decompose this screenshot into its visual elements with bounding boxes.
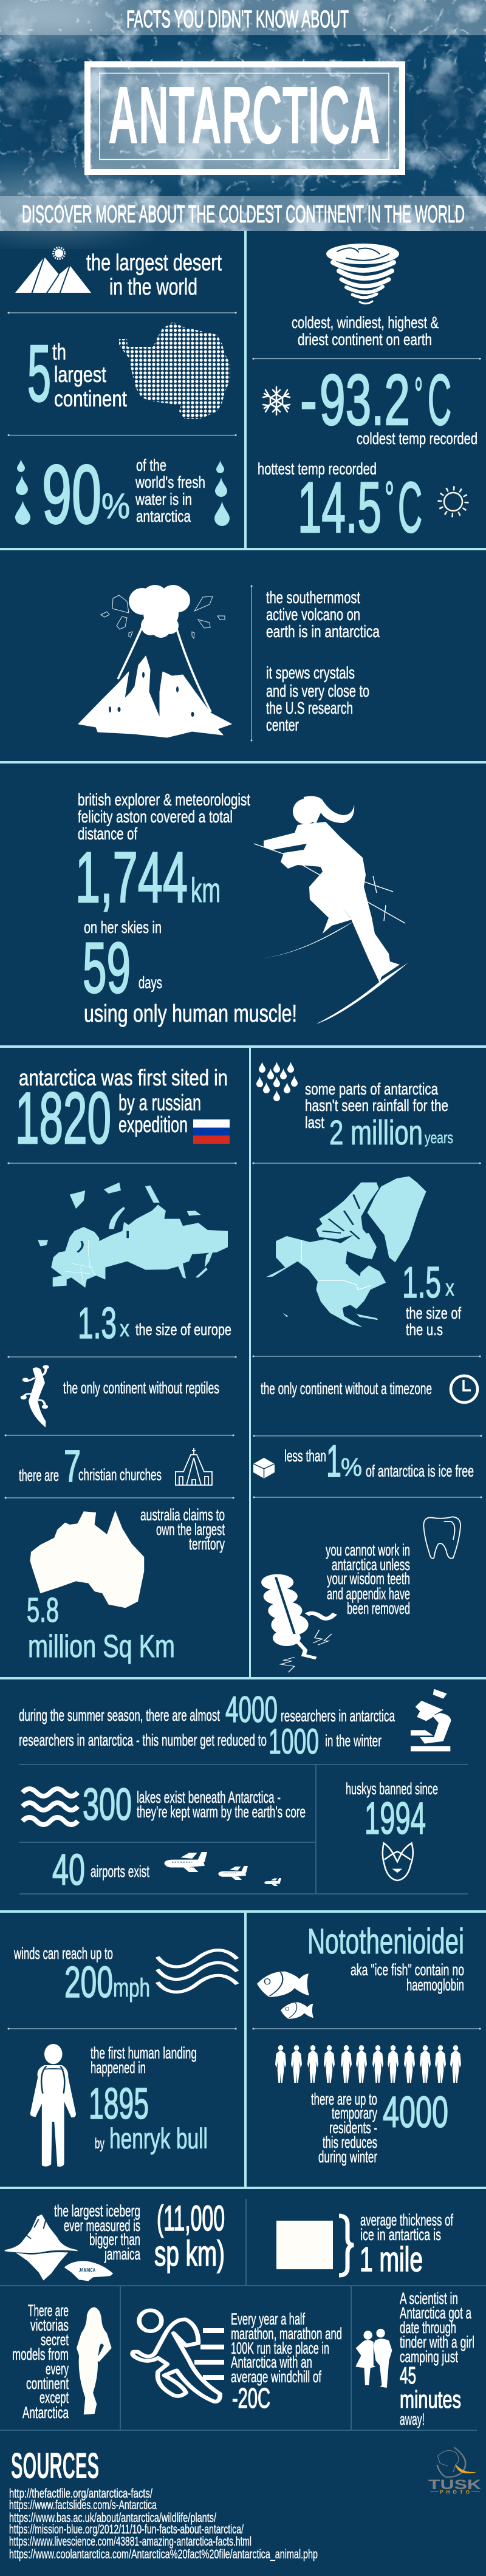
text: of the world's fresh water: antarctica <box>136 507 191 525</box>
stat: 11,000 sq km: (11,000 <box>157 2199 225 2238</box>
text: average thickness <box>360 2211 453 2244</box>
text: australia claims <box>140 1506 225 1553</box>
map: australia <box>30 1511 144 1608</box>
text: no reptiles: the only continent without reptiles <box>63 1379 219 1397</box>
text: wisdom teeth and appendix: your wisdom teeth <box>327 1570 410 1588</box>
stat: 5th: 5 <box>27 329 51 418</box>
icon: runner <box>132 2311 224 2402</box>
text: spews crystals: it spews crystals <box>266 663 355 682</box>
icon: husky head <box>383 1843 413 1881</box>
text: australia claims: own the largest <box>156 1520 225 1539</box>
text: marathon: Every year a half <box>231 2310 305 2328</box>
text: southernmost volcano: active volcano on <box>266 605 360 624</box>
stat: 45 minutes <box>400 2363 461 2413</box>
icon: person with backpack <box>30 2044 76 2167</box>
text: felicity aston intro: british explorer & meteorologist <box>78 790 250 809</box>
panel: notothenioidei fish <box>257 1922 464 2019</box>
panel: winds <box>13 1944 237 2007</box>
panel: volcano <box>78 585 380 737</box>
text: first landing: the first human landing <box>91 2044 197 2062</box>
text: temporary residents <box>311 2090 377 2166</box>
panel: no rainfall <box>256 1062 453 1152</box>
panel: coldest windiest <box>292 244 439 349</box>
panel: ice free <box>253 1436 474 1486</box>
panel: coldest temperature: C <box>428 360 451 440</box>
icon: brace <box>339 2216 354 2275</box>
stat: -93.2°C: 93.2 <box>320 360 410 440</box>
icon: erupting volcano <box>78 585 231 737</box>
stat: 90%: % <box>101 487 130 526</box>
text: source links: https://www.bas.ac.uk/about/antarctica/wildlife/plants/ <box>9 2511 216 2525</box>
text: felicity aston intro: distance of <box>78 824 137 843</box>
text: scientist date <box>400 2289 474 2366</box>
text: temporary residents: during winter <box>318 2148 377 2166</box>
stat: 14.5°C: 14.5 <box>298 468 382 548</box>
text: lakes exist: lakes exist beneath Antarctica - <box>137 1788 281 1806</box>
icon: tornado <box>326 244 399 304</box>
stat: 1.5x: x <box>445 1276 454 1301</box>
icon: woman silhouette <box>77 2307 112 2414</box>
text: southernmost volcano: earth is in antarctica <box>266 622 380 641</box>
text: by henryk bull: by <box>95 2136 104 2152</box>
text: models: every <box>46 2360 69 2378</box>
text: australia claims: territory <box>189 1535 225 1553</box>
panel: first sited 1820 <box>15 1065 230 1159</box>
icon: church <box>176 1448 212 1485</box>
icon: rain drops <box>256 1062 298 1101</box>
text: marathon: 100K run take place in <box>231 2339 329 2357</box>
stat: 300: 300 <box>83 1779 132 1830</box>
text: coldest windiest: coldest, windiest, highest & <box>292 313 439 332</box>
stat: 11,000 sq km: sp km) <box>154 2234 225 2274</box>
text: the size of the us: the size of <box>406 1304 461 1322</box>
panel: ice thickness <box>276 2211 453 2279</box>
text: models: There are <box>28 2301 69 2320</box>
text: by a russian expedition: by a russian <box>118 1090 201 1115</box>
stat: 5.8 million sq km: million Sq Km <box>28 1629 175 1664</box>
stat: 4000 residents: 4000 <box>383 2088 448 2137</box>
stat: 59 days: 59 <box>83 928 131 1008</box>
stat: 1.3x: 1.3 <box>78 1299 117 1348</box>
stat: 1820: 1820 <box>15 1078 111 1159</box>
text: winds can reach: winds can reach up to <box>13 1944 113 1963</box>
stat: 200mph: 200 <box>64 1958 113 2007</box>
text: marathon: marathon, marathon and <box>231 2325 342 2343</box>
icon: waves <box>22 1789 78 1825</box>
panel: 1.5x size of the us <box>266 1177 461 1339</box>
text: by henryk bull: henryk bull <box>109 2122 208 2154</box>
text: largest iceberg: ever measured is <box>64 2216 140 2235</box>
text: spews crystals: and is very close to <box>266 682 369 700</box>
map: russia and europe <box>38 1183 228 1288</box>
stat: 1,744 km: 1,744 <box>75 838 188 918</box>
text: th largest continent <box>52 340 128 411</box>
icon: snowflake <box>263 387 290 415</box>
icon: dotted Antarctica map <box>119 322 230 419</box>
text: southernmost volcano: the southernmost <box>266 588 360 607</box>
panel: no timezone <box>261 1376 477 1402</box>
panel: 300 lakes <box>22 1779 306 1830</box>
panel: australia territory <box>27 1506 225 1664</box>
text: first landing: happened in <box>91 2058 146 2077</box>
stat: 11,000 sq km <box>154 2199 225 2274</box>
stat: 4000 researchers: 4000 <box>225 1689 278 1730</box>
panel: tinder date <box>355 2289 474 2428</box>
text: models <box>12 2301 69 2422</box>
icon: ice cube <box>253 1458 275 1478</box>
icon: ice block <box>276 2221 333 2269</box>
icon: planes <box>164 1852 281 1886</box>
text: there are: there are <box>19 1466 59 1484</box>
icon: couple <box>355 2329 392 2388</box>
icon: gecko <box>21 1365 49 1427</box>
panel: wisdom teeth and appendix <box>261 1517 460 1672</box>
text: hottest temp recorded: hottest temp recorded <box>258 460 377 478</box>
text: by a russian expedition <box>118 1090 201 1137</box>
text: source links <box>9 2487 318 2561</box>
stat: 2 million years: years <box>425 1129 453 1147</box>
stat: 1.3x: x <box>120 1316 129 1342</box>
icon: clock <box>451 1376 477 1402</box>
text: rainfall: some parts of antarctica <box>305 1080 439 1098</box>
text: largest iceberg: the largest iceberg <box>54 2202 140 2220</box>
stat: 200mph: mph <box>113 1973 150 2003</box>
text: away: away! <box>400 2410 425 2428</box>
stat: 59 days: days <box>139 973 162 992</box>
text: models: models from <box>12 2345 69 2363</box>
icon: skier silhouette <box>254 796 408 1024</box>
panel: largest iceberg <box>5 2199 225 2281</box>
stat: -93.2°C: ° <box>414 367 423 422</box>
text: christian churches: christian churches <box>78 1466 162 1484</box>
icon: wind curves <box>157 1950 237 1992</box>
text: temporary residents: there are up to <box>311 2090 377 2108</box>
text: of the world's fresh water: water is in <box>135 490 192 508</box>
label: jamaica on map: JAMAICA <box>79 2267 95 2273</box>
icon: row of people <box>275 2045 461 2083</box>
logo: tusk photo <box>428 2447 481 2495</box>
text: largest desert: in the world <box>109 275 197 300</box>
text: first landing <box>91 2044 197 2077</box>
header: ocean foam banner <box>0 0 486 231</box>
icon: iceberg and jamaica <box>5 2215 113 2281</box>
icon: appendix <box>261 1574 335 1672</box>
text: models: except <box>39 2388 69 2407</box>
panel: sources: SOURCES <box>11 2445 99 2486</box>
text: marathon: Antarctica with an <box>231 2353 312 2371</box>
stat: 45 minutes: 45 <box>400 2363 416 2389</box>
panel: temporary residents <box>275 2045 461 2166</box>
text: temporary residents: this reduces <box>323 2133 377 2151</box>
stat: 1994: 1994 <box>364 1793 426 1843</box>
text: ice fish <box>351 1961 464 1994</box>
stat: 1000 researchers: 1000 <box>269 1722 319 1761</box>
panel: 90 percent fresh water <box>15 448 230 541</box>
stat: 1 mile: 1 mile <box>360 2240 423 2279</box>
panel: no reptiles <box>21 1365 219 1427</box>
panel: coldest temperature <box>263 360 477 448</box>
text: coldest windiest <box>292 313 439 349</box>
stat: 5.8 million sq km <box>27 1591 175 1664</box>
icon: mountains and sun <box>15 248 91 294</box>
stat: 40: 40 <box>52 1846 85 1894</box>
text: largest iceberg: jamaica <box>104 2245 141 2263</box>
text: largest desert <box>86 250 222 300</box>
text: temporary residents: temporary <box>332 2104 377 2122</box>
panel: hottest temperature: C <box>398 468 422 548</box>
text: spews crystals: the U.S research <box>266 699 353 717</box>
text: wisdom teeth and appendix: been removed <box>347 1599 410 1618</box>
logo: tusk photo: TUSK <box>428 2477 481 2492</box>
stat: 1,744 km: km <box>191 871 221 910</box>
panel: largest desert <box>15 248 222 300</box>
text: on her skies in: on her skies in <box>84 918 162 937</box>
text: wisdom teeth and appendix: antarctica unless <box>332 1556 410 1574</box>
text: source links: https://www.livescience.com/43881-amazing-antarctica-facts.html <box>9 2535 252 2549</box>
text: marathon <box>231 2310 342 2386</box>
text: wisdom teeth and appendix: you cannot work in <box>326 1541 410 1559</box>
text: rainfall: last <box>305 1113 324 1132</box>
icon: tooth <box>423 1517 460 1559</box>
panel: 5th largest continent <box>27 322 230 419</box>
text: th largest continent: largest <box>54 362 107 387</box>
text: the size of the us <box>406 1304 461 1339</box>
panel: victorias secret models <box>12 2301 112 2422</box>
text: the size of europe: the size of europe <box>135 1320 231 1339</box>
text: source links: https://www.coolantarctica.com/Antarctica%20fact%20file/antarctica_animal.php <box>9 2547 318 2561</box>
text: source links: http://thefactfile.org/antarctica-facts/ <box>9 2487 152 2501</box>
logo: tusk photo: PHOTO <box>440 2489 470 2495</box>
panel: huskies banned <box>346 1780 438 1881</box>
text: of the world's fresh water: of the <box>136 456 166 474</box>
text: average thickness: ice in antartica is <box>360 2226 441 2244</box>
text: th largest continent: th <box>52 340 66 364</box>
text: lakes exist <box>137 1788 306 1821</box>
stat: 90%: 90 <box>42 448 101 541</box>
stat: 1895: 1895 <box>89 2080 149 2128</box>
text: australia claims: australia claims to <box>140 1506 225 1524</box>
panel: researchers <box>19 1689 451 1761</box>
icon: fish <box>257 1972 313 2019</box>
text: airports exist: airports exist <box>91 1862 149 1881</box>
text: spews crystals: center <box>266 716 299 734</box>
text: models: Antarctica <box>22 2403 69 2422</box>
text: rainfall <box>305 1080 448 1132</box>
map: north america <box>266 1177 426 1327</box>
icon: microscope <box>411 1689 451 1751</box>
text: winter reduction: researchers in antarctica - this number get reduced to <box>19 1731 267 1749</box>
text: models: victorias <box>30 2316 69 2334</box>
stat: 14.5°C: ° <box>385 471 394 525</box>
panel: marathon <box>132 2310 342 2414</box>
text: summer researchers: during the summer season, there are almost <box>19 1706 220 1724</box>
panel: 1.3x size of europe <box>38 1183 231 1348</box>
text: wisdom teeth and appendix: and appendix have <box>327 1585 410 1603</box>
icon: russian flag <box>193 1119 230 1144</box>
text: by henryk bull <box>95 2122 208 2154</box>
text: source links: https://www.factslides.com/s-Antarctica <box>9 2498 157 2512</box>
stat: 1% <box>326 1436 362 1486</box>
text: temporary residents: residents - <box>329 2119 377 2137</box>
text: largest iceberg <box>54 2202 141 2263</box>
text: of the world's fresh water: world's fresh <box>135 473 205 491</box>
panel: 40 airports <box>52 1846 281 1894</box>
text: first sited: antarctica was first sited in <box>19 1065 228 1090</box>
panel: sources <box>9 2445 318 2561</box>
stat: 2 million years: 2 million <box>329 1113 423 1152</box>
stat: 45 minutes: minutes <box>400 2386 461 2413</box>
stat: 1%: % <box>341 1453 362 1481</box>
icon: water drops left <box>15 459 30 525</box>
panel: christian churches <box>19 1441 212 1491</box>
text: wisdom teeth and appendix <box>326 1541 410 1618</box>
text: in the winter: in the winter <box>325 1732 382 1750</box>
text: of the world's fresh water <box>135 456 205 525</box>
text: coldest windiest: driest continent on earth <box>298 330 432 349</box>
text: felicity aston intro <box>78 790 250 843</box>
text: spews crystals <box>266 663 369 734</box>
text: felicity aston intro: felicity aston covered a total <box>78 807 233 826</box>
stat: -20C: -20C <box>232 2382 270 2414</box>
panel: first human landing <box>30 2044 208 2167</box>
text: source links: https://mission-blue.org/2012/11/10-fun-facts-about-antarctica/ <box>9 2523 244 2537</box>
text: largest desert: the largest desert <box>86 250 222 276</box>
panel: felicity aston skier <box>75 790 408 1027</box>
text: using only human muscle: using only human muscle! <box>84 1000 297 1027</box>
text: models: secret <box>41 2331 69 2349</box>
text: lakes exist: they're kept warm by the earth's core <box>137 1803 306 1821</box>
text: southernmost volcano <box>266 588 380 641</box>
stat: 5.8 million sq km: 5.8 <box>27 1591 59 1630</box>
stat: 1.5x: 1.5 <box>402 1259 441 1307</box>
icon: water drops right <box>214 460 230 526</box>
icon: sun <box>440 488 467 515</box>
text: th largest continent: continent <box>54 386 128 411</box>
title box: Antarctica <box>87 64 402 172</box>
text: researchers in antarctica: researchers in antarctica <box>281 1707 395 1725</box>
text: the size of the us: the u.s <box>406 1320 443 1339</box>
text: less than: less than <box>284 1447 326 1465</box>
text: largest iceberg: bigger than <box>89 2230 140 2249</box>
stat: 1%: 1 <box>326 1436 341 1486</box>
panel: hottest temperature <box>258 460 467 548</box>
text: marathon: average windchill of <box>231 2368 321 2386</box>
text: by a russian expedition: expedition <box>118 1112 188 1137</box>
stat: 7: 7 <box>64 1441 81 1491</box>
stat: -93.2°C: - <box>300 360 317 440</box>
text: models: continent <box>26 2374 69 2393</box>
